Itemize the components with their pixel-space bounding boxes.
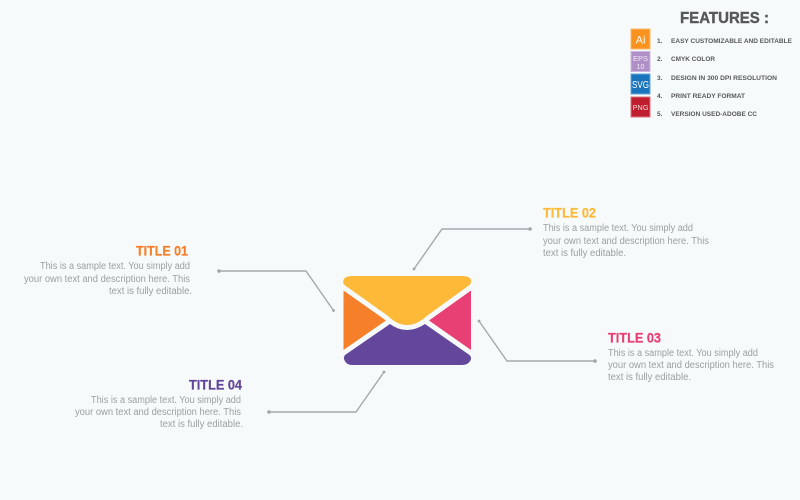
features list: 5.	[657, 111, 663, 118]
icon: PNG file	[631, 97, 650, 117]
envelope left panel	[344, 290, 386, 350]
features list: 3.	[657, 75, 663, 82]
description: your own text and description here. This	[24, 274, 190, 285]
description	[24, 261, 192, 297]
envelope flap	[343, 276, 471, 325]
description: text is fully editable.	[160, 419, 243, 430]
features list: 4.	[657, 93, 663, 100]
features list: 1.	[657, 38, 663, 45]
features list: VERSION USED-ADOBE CC	[671, 111, 757, 118]
description: text is fully editable.	[109, 286, 192, 297]
icon: Ai file: Ai	[636, 34, 645, 46]
envelope bottom panel	[344, 324, 471, 365]
icon: Ai file	[631, 29, 650, 49]
connector 3	[478, 320, 597, 363]
block: title 04	[75, 378, 243, 430]
features list: CMYK COLOR	[671, 56, 715, 63]
features list: PRINT READY FORMAT	[671, 93, 745, 100]
heading: TITLE 03	[608, 330, 661, 346]
features list: EASY CUSTOMIZABLE AND EDITABLE	[671, 38, 793, 45]
envelope right panel	[429, 290, 471, 350]
description: your own text and description here. This	[608, 360, 774, 371]
icon: EPS file	[631, 52, 650, 72]
description: This is a sample text. You simply add	[40, 261, 190, 272]
heading: TITLE 01	[136, 244, 188, 258]
icon: EPS file: EPS	[633, 54, 648, 63]
features list	[657, 38, 793, 118]
description: text is fully editable.	[608, 372, 691, 383]
heading: TITLE 04	[189, 378, 242, 392]
features list: 2.	[657, 56, 663, 63]
block: title 02	[543, 206, 709, 259]
description: your own text and description here. This	[543, 236, 709, 247]
description: This is a sample text. You simply add	[91, 395, 241, 406]
features heading: FEATURES :	[680, 10, 769, 27]
icon: SVG file	[631, 74, 650, 94]
block: title 01	[24, 244, 192, 297]
description: This is a sample text. You simply add	[543, 223, 693, 234]
description: your own text and description here. This	[75, 407, 241, 418]
connector 4	[267, 371, 385, 414]
description: text is fully editable.	[543, 248, 626, 259]
icon: SVG file: SVG	[632, 80, 649, 91]
icon: envelope	[343, 276, 471, 365]
icon: PNG file: PNG	[632, 103, 649, 112]
icon: EPS file: 10	[637, 64, 644, 71]
block: title 03	[608, 330, 774, 383]
connector 1	[217, 269, 335, 312]
description	[608, 348, 774, 383]
description: This is a sample text. You simply add	[608, 348, 758, 359]
connector 2	[413, 227, 532, 270]
description	[543, 223, 709, 259]
heading: TITLE 02	[543, 206, 596, 220]
features list: DESIGN IN 300 DPI RESOLUTION	[671, 75, 777, 82]
description	[75, 395, 243, 430]
